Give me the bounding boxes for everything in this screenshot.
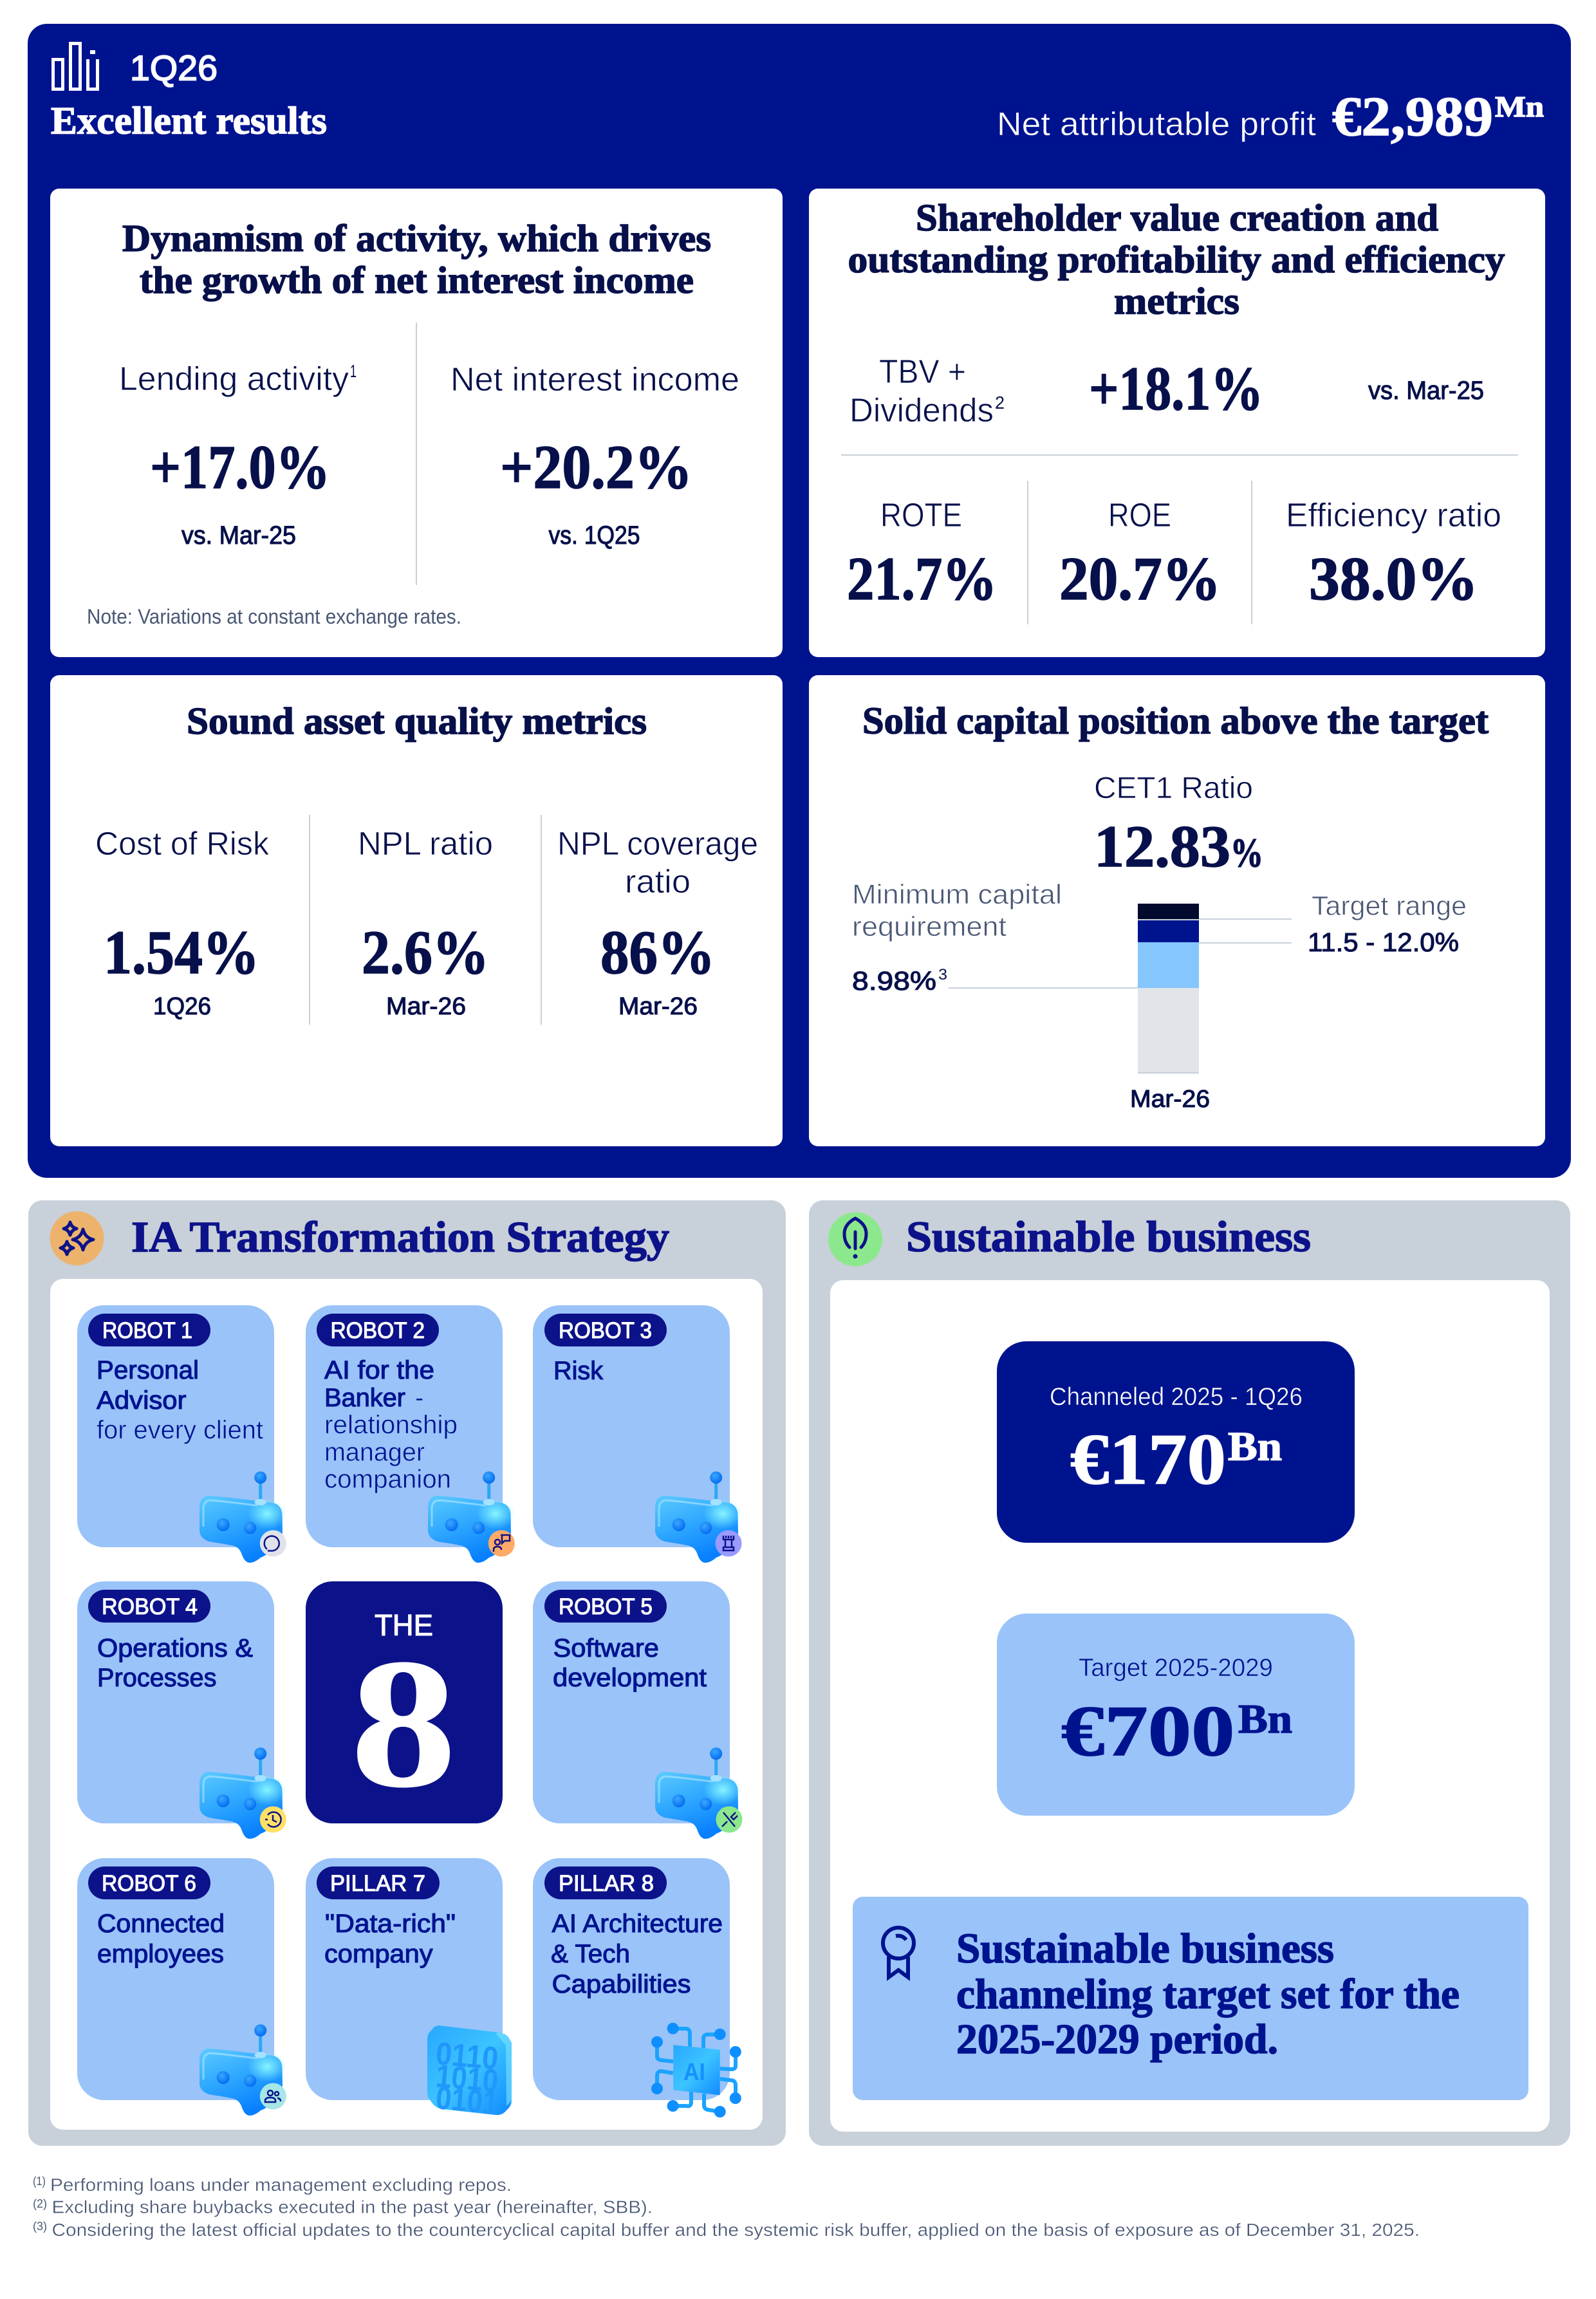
footnotes: Performing loans under management excluding repos. (50, 2175, 512, 2195)
tile: pillar 8: Capabilities (552, 1970, 691, 1998)
icon: binary data chip: 0101 (434, 2080, 500, 2121)
tile: robot 1: Personal (97, 1356, 199, 1384)
metric: CET1 ratio (1094, 770, 1263, 879)
metric: NPL ratio: NPL ratio (358, 825, 493, 862)
metric: net interest income: vs. 1Q25 (548, 521, 640, 550)
card: channeled (997, 1341, 1355, 1543)
card: target (997, 1614, 1355, 1816)
tile: robot 5: development (553, 1664, 707, 1692)
card heading: Shareholder value creation and (916, 196, 1438, 239)
tile: robot 4: Operations & (97, 1634, 253, 1662)
label: target range (1308, 891, 1467, 957)
footnotes: Excluding share buybacks executed in the past year (hereinafter, SBB). (51, 2197, 653, 2217)
metric: TBV + dividends (849, 353, 1484, 429)
icon: binary data chip (427, 2025, 512, 2121)
period label: 1Q26 (130, 48, 218, 88)
metric: CET1 ratio: % (1230, 830, 1263, 875)
icon: robot 3 risk tower (655, 1471, 742, 1563)
metric: ROTE: 21.7% (847, 544, 997, 613)
metric: NPL coverage ratio: ratio (625, 863, 691, 900)
icon: bars logo (53, 44, 98, 89)
icon: robot 6 people (200, 2024, 286, 2116)
label: minimum capital requirement: Minimum capital (852, 879, 1062, 910)
panel: asset quality (50, 675, 783, 1146)
stacked bar chart (949, 904, 1292, 1074)
footnotes: (3) (33, 2220, 47, 2233)
tile: pillar 7: PILLAR 7 (330, 1871, 425, 1896)
card heading: Solid capital position above the target (862, 699, 1489, 741)
panel: IA transformation strategy (28, 1200, 786, 2146)
metric: NPL coverage ratio: 86% (600, 918, 715, 987)
metric: NPL coverage ratio: Mar-26 (618, 993, 698, 1020)
tile: pillar 8: PILLAR 8 (559, 1871, 654, 1896)
panel: excellent results (28, 24, 1571, 1178)
panel: capital position (809, 675, 1545, 1146)
tile: the 8 (306, 1581, 503, 1826)
tile: robot 3 (533, 1305, 730, 1547)
metric: cost of risk: 1.54% (104, 918, 259, 987)
net attributable profit (997, 85, 1544, 147)
metric: cost of risk: Cost of Risk (95, 825, 269, 862)
metric: efficiency ratio: 38.0% (1309, 544, 1478, 613)
metric: cost of risk (95, 825, 269, 1020)
label: minimum capital requirement: requirement (852, 911, 1007, 942)
metric: lending activity: vs. Mar-25 (181, 521, 296, 550)
metric: net interest income (450, 361, 739, 550)
icon: medal (883, 1928, 914, 1977)
icon: AI chip (651, 2023, 741, 2118)
metric: ROE: ROE (1108, 497, 1171, 534)
icon: AI chip: AI (683, 2059, 705, 2086)
metric: CET1 ratio: CET1 Ratio (1094, 770, 1253, 805)
note: Note: Variations at constant exchange rates. (87, 605, 461, 628)
footnotes: (1) (33, 2175, 46, 2188)
card: target: Target 2025-2029 (1079, 1654, 1273, 1682)
icon: leaf (828, 1213, 882, 1267)
tile: robot 4: ROBOT 4 (102, 1594, 198, 1619)
tile: robot 2: companion (324, 1465, 451, 1493)
icon: robot 5 tools (655, 1747, 743, 1839)
icon: sparkles (50, 1211, 104, 1265)
footnotes: (2) (33, 2197, 47, 2210)
card: channeled: Bn (1228, 1424, 1282, 1469)
net attributable profit: Mn (1495, 90, 1544, 123)
metric: TBV + dividends: 2 (995, 393, 1005, 413)
metric: CET1 ratio: 12.83 (1094, 814, 1230, 879)
tile: the 8: 8 (351, 1621, 456, 1826)
card: channeled: €170 (1070, 1420, 1226, 1500)
card heading (122, 217, 711, 301)
tile: robot 6: ROBOT 6 (102, 1871, 196, 1896)
metric: NPL coverage ratio (557, 825, 758, 1020)
metric: NPL ratio: Mar-26 (386, 993, 466, 1020)
tile: robot 2: ROBOT 2 (331, 1318, 425, 1343)
card heading: metrics (1114, 279, 1239, 322)
tile: robot 2: Banker (324, 1384, 405, 1412)
tile: robot 1: for every client (97, 1416, 263, 1444)
white inner panel (830, 1280, 1550, 2132)
panel: dynamism of activity (50, 189, 783, 657)
tile: robot 1 (77, 1305, 274, 1547)
metric: ROE: 20.7% (1059, 544, 1221, 613)
tile: robot 2: - (415, 1384, 423, 1412)
tile: robot 4: Processes (97, 1664, 216, 1692)
metric: lending activity: 1 (350, 361, 357, 381)
metric: TBV + dividends: vs. Mar-25 (1368, 377, 1484, 405)
tile: pillar 8 (533, 1858, 730, 2100)
tile: robot 1: ROBOT 1 (102, 1318, 192, 1343)
heading: excellent results: Excellent results (51, 99, 327, 142)
card heading: Sound asset quality metrics (187, 700, 647, 742)
metric: NPL ratio: 2.6% (362, 918, 489, 987)
axis label: Mar-26 (1130, 1086, 1210, 1113)
metric: TBV + dividends: +18.1% (1089, 354, 1263, 423)
heading: IA Transformation Strategy (131, 1213, 669, 1261)
panel: sustainable business (809, 1200, 1570, 2146)
card heading: outstanding profitability and efficiency (848, 238, 1505, 281)
tile: robot 5: ROBOT 5 (559, 1594, 653, 1619)
card heading: Dynamism of activity, which drives (122, 217, 711, 259)
metric: TBV + dividends: Dividends (849, 392, 994, 429)
icon: binary data chip: 1010 (434, 2058, 500, 2099)
net attributable profit: Net attributable profit (997, 106, 1316, 142)
icon: robot 4 clock (200, 1747, 286, 1839)
card: channeled: Channeled 2025 - 1Q26 (1050, 1383, 1303, 1411)
heading: Sustainable business (906, 1212, 1311, 1261)
net attributable profit: €2,989 (1332, 85, 1493, 147)
tile: pillar 7: company (324, 1940, 432, 1968)
white inner panel (50, 1279, 763, 2130)
tile: robot 5 (533, 1581, 730, 1823)
tile: robot 3: ROBOT 3 (559, 1318, 652, 1343)
metric: cost of risk: 1Q26 (153, 993, 211, 1020)
label: target range: 11.5 - 12.0% (1308, 927, 1459, 957)
metric: TBV + dividends: TBV + (879, 353, 966, 391)
icon: robot 2 banker (428, 1471, 515, 1563)
tile: robot 6: employees (97, 1940, 224, 1968)
tile: robot 4 (77, 1581, 274, 1823)
card: target: €700 (1061, 1691, 1234, 1771)
metric: lending activity: Lending activity (119, 360, 349, 398)
metric: net interest income: Net interest income (450, 361, 739, 398)
tile: robot 3: Risk (553, 1357, 604, 1385)
metric: ROTE (847, 497, 997, 613)
tile: robot 2 (306, 1305, 503, 1547)
tile: robot 2: manager (324, 1438, 425, 1466)
tile: robot 2: AI for the (324, 1356, 434, 1384)
tile: robot 5: Software (553, 1634, 659, 1662)
callout text: channeling target set for the (956, 1971, 1460, 2018)
label: minimum capital requirement: 8.98% (852, 966, 936, 996)
tile: robot 6 (77, 1858, 274, 2100)
tile: robot 2: relationship (324, 1411, 458, 1439)
card heading: the growth of net interest income (140, 259, 694, 301)
tile: pillar 7 (306, 1858, 503, 2100)
card heading (848, 196, 1505, 322)
footnotes: Considering the latest official updates to the countercyclical capital buffer and the systemic risk buffer, applied on the basis of exposure as of December 31, 2025. (51, 2220, 1420, 2240)
callout text: Sustainable business (956, 1925, 1334, 1972)
label: minimum capital requirement: 3 (938, 966, 947, 983)
metric: lending activity: +17.0% (150, 433, 330, 501)
metric: efficiency ratio: Efficiency ratio (1286, 497, 1501, 534)
tile: robot 1: Advisor (97, 1386, 187, 1415)
label: minimum capital requirement (852, 879, 1062, 996)
metric: net interest income: +20.2% (500, 433, 692, 501)
card: target: Bn (1238, 1696, 1292, 1742)
tile: robot 6: Connected (97, 1910, 225, 1938)
metric: NPL ratio (358, 825, 493, 1020)
metric: ROTE: ROTE (880, 497, 962, 534)
callout text (956, 1925, 1460, 2063)
metric: lending activity (119, 360, 357, 550)
tile: the 8: THE (375, 1608, 433, 1642)
tile: pillar 8: & Tech (551, 1940, 630, 1968)
metric: efficiency ratio (1286, 497, 1501, 613)
panel: shareholder value (809, 189, 1545, 657)
callout (853, 1897, 1528, 2100)
metric: NPL coverage ratio: NPL coverage (557, 825, 758, 862)
icon: robot 1 chat (200, 1471, 286, 1563)
callout text: 2025-2029 period. (956, 2016, 1278, 2063)
icon: binary data chip: 0110 (434, 2035, 500, 2076)
metric: ROE (1059, 497, 1221, 613)
footnotes (33, 2175, 1420, 2240)
tile: pillar 8: AI Architecture (552, 1910, 723, 1938)
label: target range: Target range (1312, 891, 1467, 920)
tile: pillar 7: "Data-rich" (325, 1910, 456, 1938)
